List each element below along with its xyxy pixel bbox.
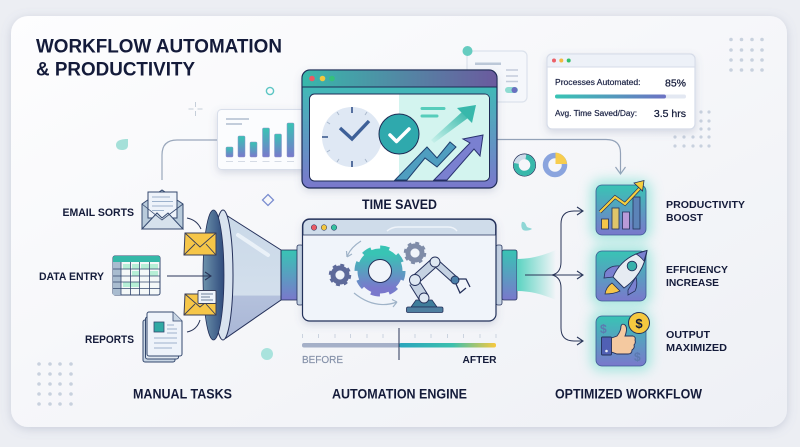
stats card: Avg. Time Saved/Day: — [555, 109, 637, 118]
funnel — [203, 210, 301, 340]
clock — [322, 107, 382, 167]
label: productivity boost: PRODUCTIVITY — [666, 199, 745, 211]
section label: manual tasks: MANUAL TASKS — [133, 386, 232, 402]
title: WORKFLOW AUTOMATION — [36, 37, 282, 58]
decorative shapes — [116, 87, 532, 360]
yellow envelope top — [184, 233, 216, 255]
small gear top — [406, 244, 424, 262]
tile: output maximized: $ — [600, 322, 607, 336]
label: output maximized — [666, 329, 727, 354]
connector: email to chart card — [162, 140, 218, 180]
label: email sorts: EMAIL SORTS — [62, 207, 134, 219]
title: & PRODUCTIVITY — [36, 60, 195, 81]
section label: optimized workflow: OPTIMIZED WORKFLOW — [555, 386, 702, 402]
label: efficiency increase: INCREASE — [666, 277, 719, 289]
yellow envelope bottom with paper — [184, 290, 216, 315]
input: spreadsheet icon — [113, 256, 160, 295]
label: productivity boost: BOOST — [666, 212, 704, 224]
section label: automation engine: AUTOMATION ENGINE — [332, 386, 467, 402]
stats card: 85% — [665, 78, 686, 90]
check badge — [379, 114, 419, 154]
funnel rim — [213, 210, 233, 340]
branching arrows — [525, 211, 583, 341]
small settings card — [462, 46, 527, 102]
tile: productivity boost — [591, 180, 651, 240]
donut charts — [514, 152, 567, 176]
input: email icon — [142, 190, 183, 229]
before-after slider: AFTER — [462, 354, 497, 366]
screen — [310, 94, 490, 181]
window: automation engine — [302, 219, 496, 321]
before-after slider — [302, 328, 497, 366]
arrow: data entry into funnel — [167, 275, 211, 277]
label: reports: REPORTS — [85, 334, 134, 346]
title — [36, 37, 282, 81]
teal output flow — [517, 250, 556, 300]
label: data entry: DATA ENTRY — [39, 271, 105, 283]
curved arrows to funnel — [187, 218, 201, 332]
small gear left — [330, 266, 350, 284]
tile: output maximized: $ — [634, 350, 641, 364]
bar chart card — [218, 110, 308, 170]
tile: efficiency increase — [591, 246, 651, 306]
input: reports icon — [143, 312, 182, 362]
funnel neck — [281, 250, 301, 300]
stats card — [547, 54, 695, 129]
funnel cone — [226, 215, 281, 338]
label: output maximized: MAXIMIZED — [666, 342, 727, 354]
title bar — [303, 220, 496, 235]
text lines — [422, 108, 444, 116]
tile: output maximized — [591, 311, 651, 371]
funnel opening — [203, 210, 224, 340]
output neck and collars — [297, 245, 517, 305]
label: output maximized: OUTPUT — [666, 329, 711, 341]
robot arm — [406, 257, 470, 312]
decorative dot grids — [37, 38, 764, 406]
label: productivity boost — [666, 199, 745, 224]
growth arrow purple — [434, 135, 483, 180]
label: efficiency increase: EFFICIENCY — [666, 264, 728, 276]
stats card: 3.5 hrs — [654, 108, 686, 120]
before-after slider: BEFORE — [302, 354, 343, 366]
large gear — [358, 248, 402, 294]
tile: output maximized: $ — [635, 316, 643, 331]
label: time saved: TIME SAVED — [362, 197, 437, 212]
growth arrow zigzag — [395, 142, 456, 180]
screen highlight — [399, 94, 489, 180]
connector: time saved to optimized workflow — [497, 140, 620, 174]
label: efficiency increase — [666, 264, 728, 289]
stats card: Processes Automated: — [555, 78, 640, 87]
rotation arrows — [346, 241, 361, 257]
title bar — [302, 70, 497, 87]
growth arrow teal — [431, 105, 476, 143]
window: time saved — [302, 70, 497, 188]
